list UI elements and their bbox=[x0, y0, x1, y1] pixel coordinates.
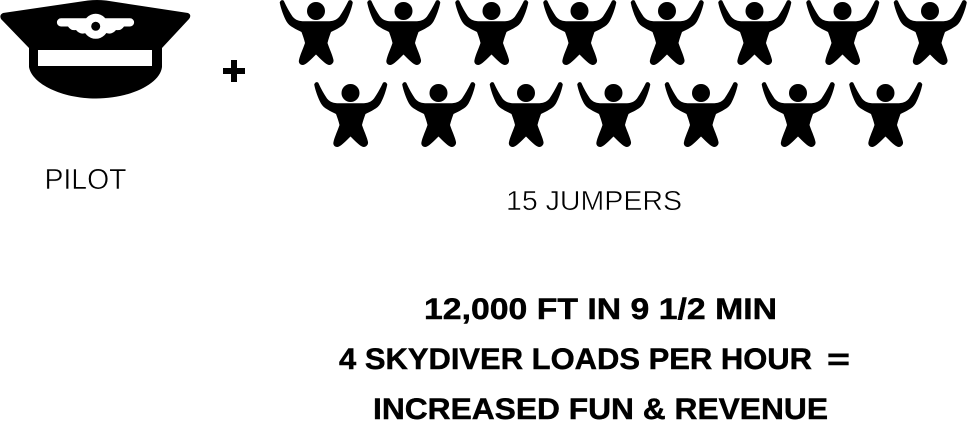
jumper 13 bbox=[665, 82, 738, 147]
line: loads per hour: 4 SKYDIVER LOADS PER HOUR bbox=[339, 343, 812, 376]
jumper 2 bbox=[367, 0, 440, 65]
jumper 8 bbox=[894, 0, 967, 65]
jumper 7 bbox=[806, 0, 879, 65]
jumper 6 bbox=[718, 0, 791, 65]
jumper 3 bbox=[455, 0, 528, 65]
jumper 1 bbox=[280, 0, 353, 65]
line: equals sign: = bbox=[827, 343, 850, 376]
jumper 12 bbox=[577, 82, 650, 147]
group: fifteen jumpers bbox=[280, 0, 967, 147]
line: result: INCREASED FUN & REVENUE bbox=[373, 393, 828, 426]
jumper 5 bbox=[631, 0, 704, 65]
jumper 15 bbox=[849, 82, 922, 147]
icon: plus sign bbox=[223, 60, 245, 82]
label: pilot: PILOT bbox=[44, 164, 127, 196]
line: altitude and time: 12,000 FT IN 9 1/2 MIN bbox=[424, 293, 777, 326]
jumper 9 bbox=[314, 82, 387, 147]
jumper 11 bbox=[490, 82, 563, 147]
icon: pilot hat bbox=[0, 0, 190, 98]
jumper 4 bbox=[543, 0, 616, 65]
jumper 14 bbox=[762, 82, 835, 147]
label: 15 jumpers: 15 JUMPERS bbox=[506, 185, 682, 216]
jumper 10 bbox=[402, 82, 475, 147]
headline text block bbox=[339, 293, 850, 426]
